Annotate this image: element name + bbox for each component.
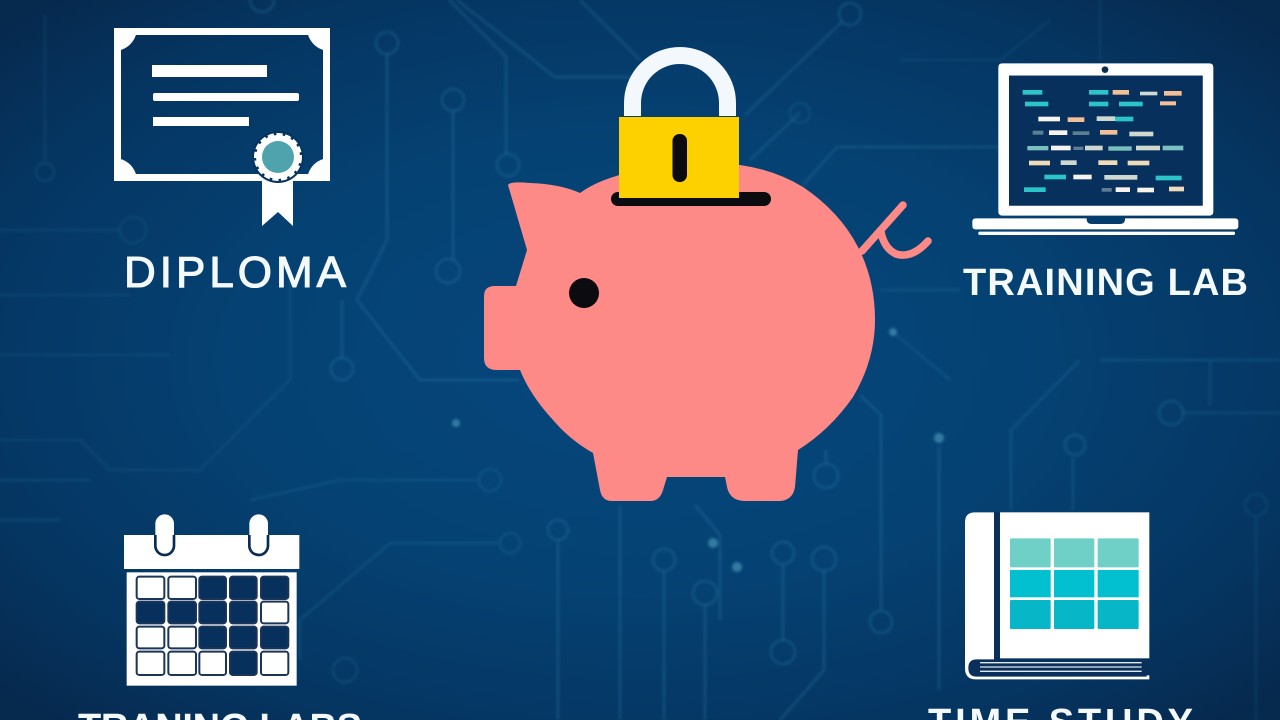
diploma corners xyxy=(114,28,330,181)
piggy body xyxy=(484,163,875,501)
calendar cells xyxy=(137,577,288,675)
padlock shackle xyxy=(632,56,728,116)
book gutter xyxy=(994,512,1000,659)
laptop screen inner xyxy=(1009,76,1203,206)
laptop camera xyxy=(1102,66,1108,73)
book cover xyxy=(1000,512,1149,658)
piggy eye xyxy=(569,278,599,308)
piggy tail xyxy=(862,205,928,255)
calendar body xyxy=(127,572,297,686)
timetable grid xyxy=(1010,538,1139,629)
laptop screen xyxy=(998,63,1213,216)
laptop base xyxy=(972,218,1238,229)
icon: padlock and piggy bank xyxy=(484,56,928,501)
book spine xyxy=(965,512,1149,679)
label: diploma: DIPLOMA xyxy=(124,248,347,297)
code lines xyxy=(1023,90,1184,192)
calendar header xyxy=(124,535,299,569)
diploma ribbon xyxy=(262,178,293,226)
diploma seal xyxy=(252,131,304,183)
icon: laptop with code xyxy=(972,63,1238,235)
padlock body xyxy=(619,117,739,198)
diploma text lines xyxy=(152,65,299,126)
icon: diploma xyxy=(114,28,330,226)
piggy coin slot xyxy=(611,192,771,206)
calendar rings xyxy=(155,514,268,556)
book page edges xyxy=(968,659,1147,677)
diploma frame xyxy=(114,28,330,181)
label: training lab: TRAINING LAB xyxy=(963,262,1248,304)
icon: calendar xyxy=(124,514,299,686)
book page lines xyxy=(980,663,1142,671)
padlock keyhole xyxy=(672,134,687,182)
laptop base underline xyxy=(978,232,1235,235)
icon: book with timetable xyxy=(965,512,1149,679)
